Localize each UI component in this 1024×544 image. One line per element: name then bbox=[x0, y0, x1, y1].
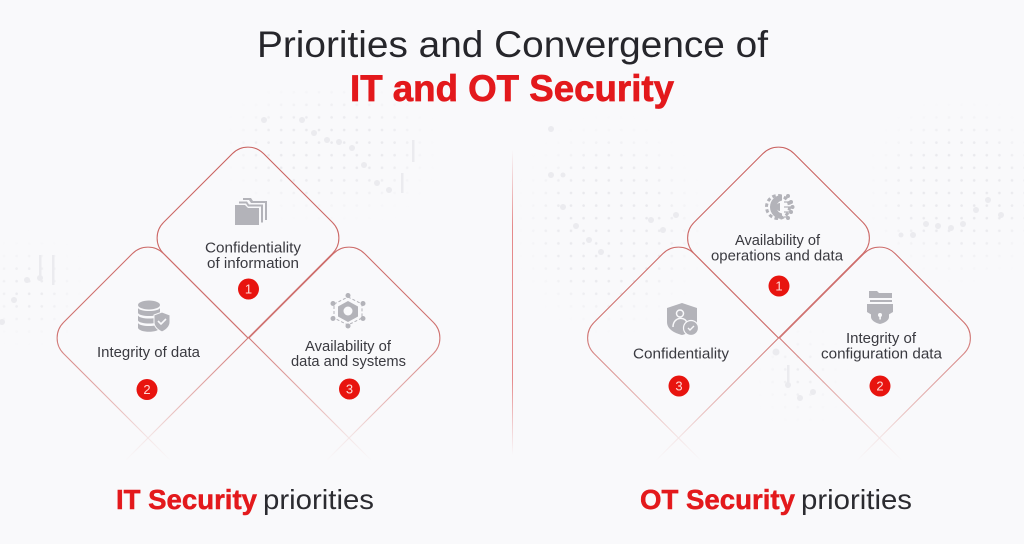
diamond: integrity of data bbox=[57, 247, 248, 460]
text: availability of operations and data bbox=[711, 233, 844, 264]
text: confidentiality: Confidentiality bbox=[633, 346, 730, 362]
text: confidentiality of information bbox=[205, 240, 302, 272]
panel: IT security priorities bbox=[57, 147, 440, 460]
text: availability of operations and data: Availability of bbox=[735, 233, 821, 249]
heading: IT security priorities bbox=[116, 484, 374, 515]
icon: database with shield bbox=[138, 300, 170, 332]
badge 3 bbox=[339, 378, 360, 400]
badge 1: 1 bbox=[775, 278, 783, 294]
badge 2: 2 bbox=[143, 382, 151, 397]
text: integrity of configuration data: Integrity of bbox=[846, 331, 917, 347]
badge 1: 1 bbox=[245, 282, 252, 296]
heading: OT security priorities bbox=[640, 484, 912, 515]
text: availability of data and systems: Availability of bbox=[305, 339, 392, 355]
badge 1 bbox=[238, 278, 259, 300]
panel: OT security priorities bbox=[588, 147, 970, 460]
badge 2 bbox=[870, 376, 890, 396]
diamond: availability of operations and data bbox=[688, 147, 869, 338]
heading: IT security priorities: priorities bbox=[263, 484, 374, 515]
diamond: availability of data and systems bbox=[249, 247, 440, 460]
background dot pattern bbox=[0, 104, 1024, 401]
icon: shield with user bbox=[667, 303, 698, 336]
badge 1 bbox=[768, 276, 790, 296]
badge 3 bbox=[668, 376, 690, 396]
text: integrity of data: Integrity of data bbox=[97, 345, 201, 361]
text: availability of data and systems: data and systems bbox=[291, 354, 406, 370]
text: availability of operations and data: operations and data bbox=[711, 248, 844, 264]
text: availability of data and systems bbox=[291, 339, 406, 370]
badge 3: 3 bbox=[346, 382, 353, 396]
diamond: confidentiality bbox=[588, 247, 778, 460]
center divider bbox=[512, 150, 513, 455]
text: confidentiality of information: of information bbox=[207, 256, 299, 272]
text: integrity of configuration data: configuration data bbox=[821, 346, 943, 362]
diamond: confidentiality of information bbox=[157, 147, 339, 338]
title line 1: Priorities and Convergence of bbox=[257, 24, 769, 65]
icon: stacked folders bbox=[235, 198, 267, 225]
heading: IT security priorities: IT Security bbox=[116, 484, 257, 515]
title bbox=[257, 24, 769, 109]
icon: network hexagon bbox=[330, 293, 366, 328]
heading: OT security priorities: OT Security bbox=[640, 484, 795, 515]
badge 2 bbox=[136, 379, 158, 400]
text: confidentiality of information: Confidentiality bbox=[205, 240, 302, 256]
text: integrity of configuration data bbox=[821, 331, 943, 362]
icon: folder with shield bbox=[867, 291, 893, 324]
diamond: integrity of configuration data bbox=[780, 247, 970, 460]
title line 2: IT and OT Security bbox=[350, 68, 674, 109]
badge 3: 3 bbox=[675, 378, 683, 394]
badge 2: 2 bbox=[876, 378, 884, 394]
icon: gear with circuit bbox=[766, 194, 794, 220]
heading: OT security priorities: priorities bbox=[801, 484, 912, 515]
